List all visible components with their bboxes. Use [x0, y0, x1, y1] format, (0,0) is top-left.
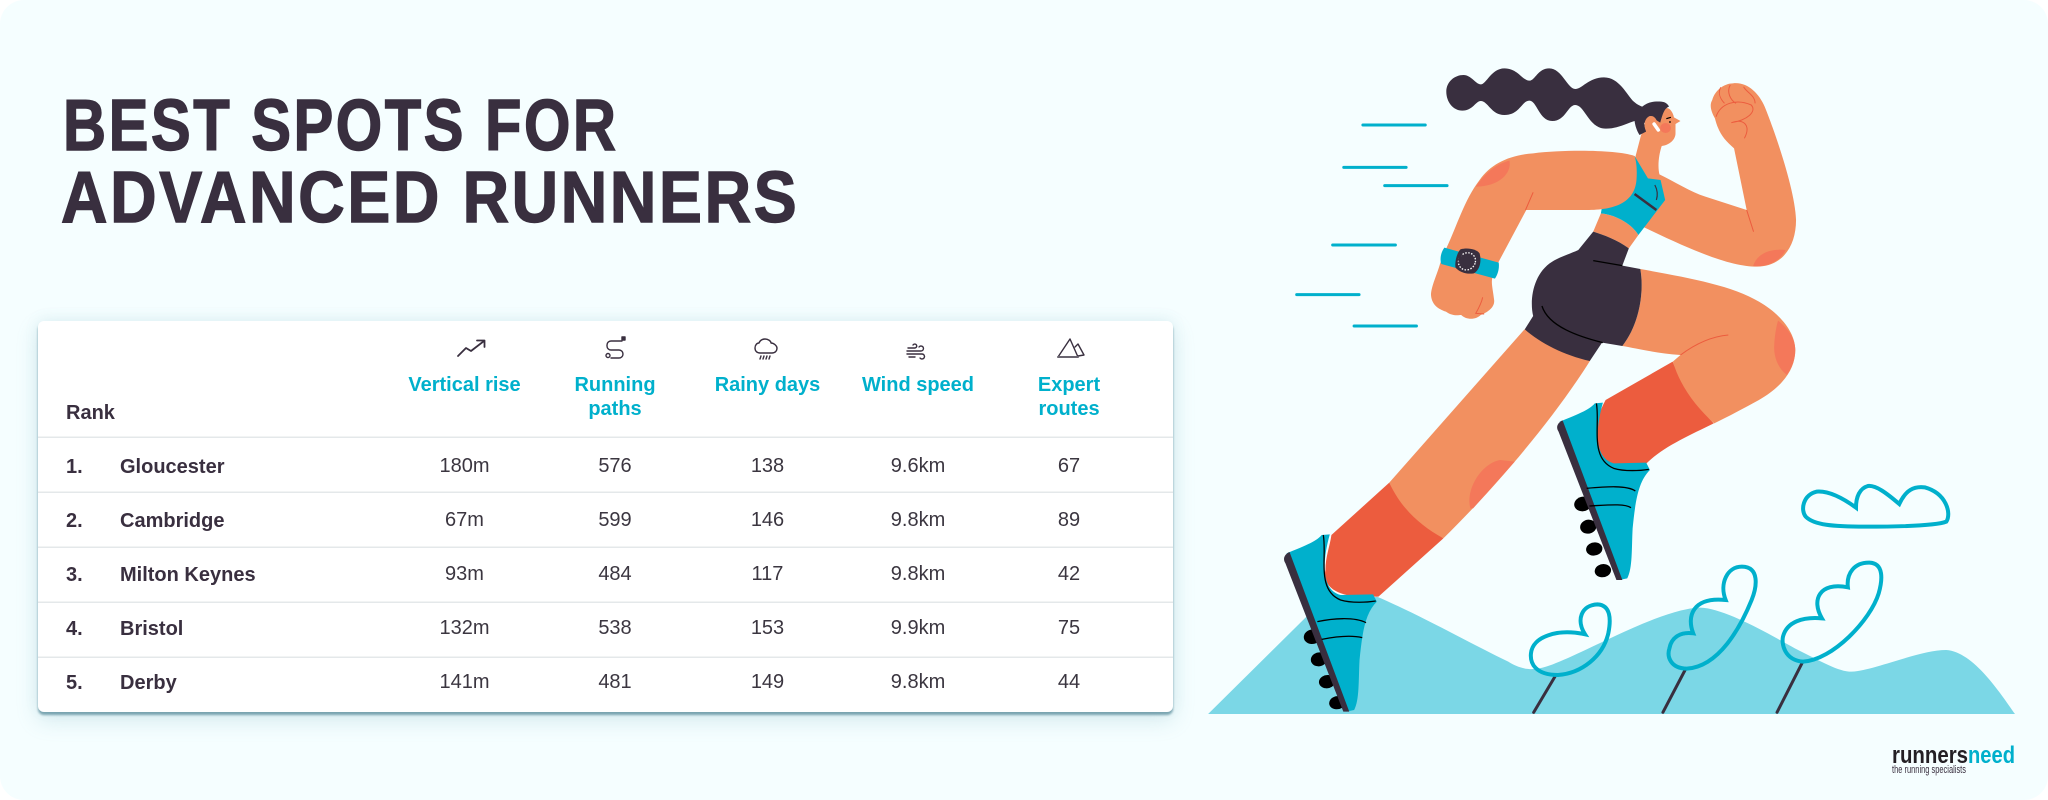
table row: Milton Keynes: 42: [1058, 563, 1080, 585]
table row: Bristol: 132m: [439, 617, 490, 639]
table row: Bristol: 9.9km: [891, 617, 945, 639]
near arm and hand: [1431, 151, 1637, 319]
landscape: hills, trees and cloud: [1208, 486, 2015, 714]
column heading: expert routes: routes: [1038, 398, 1100, 420]
icon: route: [606, 337, 625, 358]
table row: Gloucester: Gloucester: [120, 456, 225, 478]
logo: runnersneed: need: [1968, 742, 2015, 769]
speed lines: [1297, 125, 1447, 326]
ear and earbud: [1645, 116, 1658, 134]
table row: Milton Keynes: 484: [598, 563, 632, 585]
sports bra: [1601, 156, 1665, 235]
midriff: [1593, 213, 1638, 248]
table row: Bristol: Bristol: [120, 618, 183, 640]
table row: Derby: 141m: [439, 671, 490, 693]
table row: Milton Keynes: 93m: [445, 563, 484, 585]
table row: Derby: 149: [751, 671, 784, 693]
hills: [1208, 597, 2015, 714]
table row: Bristol: [66, 617, 1080, 640]
column heading: rainy days: Rainy days: [715, 374, 820, 396]
body, arms and head: [1431, 68, 1796, 423]
table row: Derby: 9.8km: [891, 671, 945, 693]
table row: Bristol: 75: [1058, 617, 1080, 639]
title: [61, 86, 799, 238]
table row: Gloucester: [66, 455, 1080, 478]
table row: Cambridge: [66, 509, 1080, 532]
tree: [1531, 604, 1610, 712]
neck and face: [1635, 108, 1680, 182]
ponytail hair: [1446, 68, 1669, 135]
far arm and fist: [1640, 83, 1796, 267]
front leg and leading shoe: [1557, 362, 1714, 580]
table row: Cambridge: 67m: [445, 509, 484, 531]
table row: Milton Keynes: 9.8km: [891, 563, 945, 585]
table row: Cambridge: 599: [598, 509, 632, 531]
table row: Derby: Derby: [120, 672, 178, 694]
title: ADVANCED RUNNERS: [61, 158, 799, 238]
tree: [1663, 567, 1756, 712]
table row: Cambridge: 89: [1058, 509, 1080, 531]
runner: [1284, 68, 1796, 712]
table row: Milton Keynes: 3.: [66, 564, 83, 586]
table row: Gloucester: 9.6km: [891, 455, 945, 477]
logo: runnersneed: the running specialists: [1892, 764, 1966, 776]
shorts: [1525, 232, 1642, 361]
table row: Milton Keynes: Milton Keynes: [120, 564, 256, 586]
table row: Cambridge: 2.: [66, 510, 83, 532]
eye: [1666, 117, 1671, 122]
table row: Milton Keynes: [66, 563, 1080, 586]
icon: wind: [907, 344, 924, 359]
table row: Cambridge: 9.8km: [891, 509, 945, 531]
icon: mountains: [1058, 339, 1084, 357]
table row: Gloucester: 67: [1058, 455, 1080, 477]
column heading: rank: Rank: [66, 402, 116, 424]
wrist watch: [1441, 248, 1499, 279]
table row: Bristol: 153: [751, 617, 784, 639]
table row: Gloucester: 180m: [439, 455, 490, 477]
table row: Derby: 44: [1058, 671, 1080, 693]
rear leg and trailing shoe: [1284, 329, 1590, 712]
table row: Milton Keynes: 117: [752, 563, 783, 585]
column heading: running paths: Running: [574, 374, 656, 396]
column heading: vertical rise: Vertical rise: [408, 374, 521, 396]
column heading: wind speed: Wind speed: [862, 374, 974, 396]
icon: rain cloud: [755, 339, 777, 359]
table row: Cambridge: Cambridge: [120, 510, 224, 532]
table row: Bristol: 4.: [66, 618, 83, 640]
table header: [66, 337, 1100, 424]
icon: rising arrow: [458, 340, 484, 356]
front thigh: [1622, 269, 1795, 423]
column heading: expert routes: Expert: [1038, 374, 1100, 396]
column heading: running paths: paths: [588, 398, 642, 420]
logo: runnersneed: [1892, 742, 2015, 776]
title: BEST SPOTS FOR: [63, 86, 618, 166]
table row: Gloucester: 576: [598, 455, 632, 477]
logo: runnersneed: runners: [1892, 742, 1968, 769]
panel: ranking table: [38, 321, 1173, 712]
table row: Bristol: 538: [598, 617, 632, 639]
table row: Derby: [66, 671, 1080, 694]
table row: Cambridge: 146: [751, 509, 784, 531]
tree: [1777, 563, 1881, 712]
table row: Gloucester: 1.: [66, 456, 83, 478]
table row: Gloucester: 138: [751, 455, 784, 477]
cloud: [1803, 486, 1948, 527]
table row: Derby: 5.: [66, 672, 83, 694]
table row: Derby: 481: [598, 671, 632, 693]
